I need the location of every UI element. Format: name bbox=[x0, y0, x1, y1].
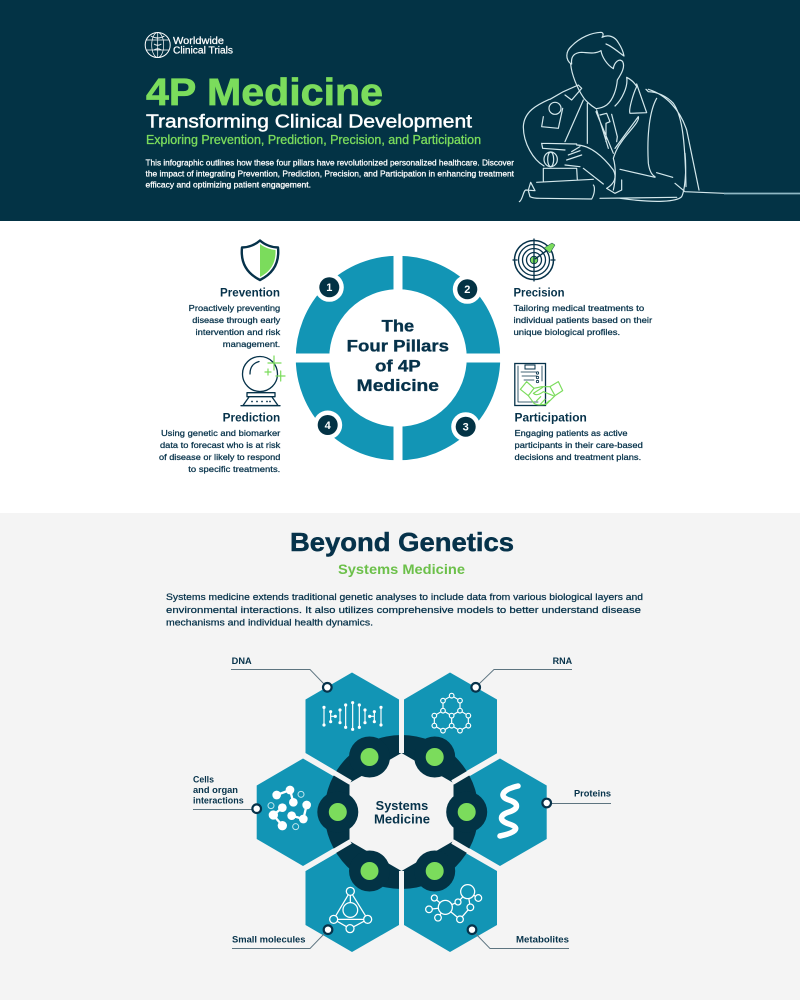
baseline stroke right bbox=[724, 192, 800, 194]
logo: Worldwide Clinical Trials: Worldwide bbox=[173, 35, 224, 47]
icon: shield bbox=[242, 240, 278, 280]
icon: small molecule bbox=[330, 887, 372, 933]
text: prediction bbox=[159, 413, 281, 474]
dark ring bbox=[324, 735, 478, 889]
centre label: Systems bbox=[376, 799, 428, 813]
text: prediction: to specific treatments. bbox=[188, 464, 280, 474]
callout: small molecules: Small molecules bbox=[232, 935, 306, 945]
hexagon gaps bbox=[304, 700, 499, 924]
callout: small molecules bbox=[232, 925, 332, 948]
donut chart: four pillars ring: 2 bbox=[464, 284, 470, 296]
intro text: This infographic outlines how these four pillars have revolutionized personalized healthcare. Discover bbox=[146, 157, 514, 167]
donut centre heading: The bbox=[382, 317, 414, 336]
callout: metabolites: Metabolites bbox=[516, 935, 569, 945]
icon: RNA bbox=[432, 693, 471, 733]
donut chart: four pillars ring: 4 bbox=[325, 420, 332, 432]
callout: metabolites bbox=[468, 925, 569, 948]
hexagon: cells bbox=[257, 758, 350, 866]
hexagon: small molecules bbox=[306, 844, 399, 952]
text: participation: Engaging patients as active bbox=[514, 428, 628, 438]
centre label bbox=[374, 799, 430, 827]
callout: cells and organ interactions bbox=[193, 775, 261, 813]
donut chart: four pillars ring bbox=[290, 250, 506, 466]
icon: crystal ball bbox=[241, 356, 285, 406]
diagram: systems medicine hexagons bbox=[257, 672, 547, 952]
centre hexagon bbox=[350, 753, 454, 871]
icon: DNA bbox=[323, 702, 382, 730]
panel: beyond genetics bbox=[0, 513, 800, 1000]
subtitle: Transforming Clinical Development bbox=[146, 112, 472, 132]
body text: mechanisms and individual health dynamics. bbox=[166, 618, 373, 628]
text: participation: participants in their care-based bbox=[514, 440, 643, 450]
donut centre heading bbox=[347, 317, 449, 395]
heading: beyond genetics: Beyond Genetics bbox=[290, 527, 514, 557]
callout: DNA: DNA bbox=[232, 656, 252, 666]
donut centre heading: Medicine bbox=[357, 376, 439, 395]
donut centre heading: of 4P bbox=[375, 356, 421, 376]
callout: DNA bbox=[231, 656, 332, 692]
text: prevention: management. bbox=[223, 339, 280, 349]
intro text: efficacy and optimizing patient engagement. bbox=[146, 180, 311, 190]
donut chart: four pillars ring: 3 bbox=[463, 422, 469, 434]
intro text bbox=[146, 157, 515, 190]
centre label: Medicine bbox=[374, 813, 430, 827]
intro text: the impact of integrating Prevention, Prediction, Precision, and Participation in enhancing treatment bbox=[146, 168, 515, 178]
text: prevention bbox=[189, 288, 281, 349]
panel: four pillars bbox=[159, 239, 652, 474]
hexagon: proteins bbox=[454, 758, 547, 866]
text: prevention: Prevention bbox=[220, 288, 280, 300]
callout: proteins: Proteins bbox=[574, 789, 611, 799]
hexagon: DNA bbox=[306, 672, 399, 780]
body text: environmental interactions. It also utilizes comprehensive models to better understand disease bbox=[166, 605, 641, 616]
icon: cells bbox=[268, 786, 311, 830]
text: participation bbox=[514, 413, 643, 462]
tagline: Exploring Prevention, Prediction, Precision, and Participation bbox=[146, 133, 481, 147]
subheading: systems medicine: Systems Medicine bbox=[338, 561, 465, 577]
hexagon: RNA bbox=[404, 672, 497, 780]
text: prediction: of disease or likely to respond bbox=[159, 452, 281, 462]
donut centre heading: Four Pillars bbox=[347, 337, 449, 356]
text: precision bbox=[514, 288, 652, 337]
illustration: scientist at a microscope, single line art bbox=[519, 32, 724, 202]
callout: RNA: RNA bbox=[553, 656, 573, 666]
text: prevention: intervention and risk bbox=[196, 327, 281, 337]
logo: Worldwide Clinical Trials: Clinical Trials bbox=[173, 44, 233, 56]
text: prediction: Prediction bbox=[223, 413, 280, 425]
callout: cells and organ interactions: Cells bbox=[193, 775, 214, 785]
text: precision: Precision bbox=[514, 288, 564, 300]
callout: proteins bbox=[542, 789, 611, 807]
panel: header bbox=[0, 0, 800, 221]
text: participation: Participation bbox=[514, 413, 587, 425]
node circles bbox=[317, 736, 487, 892]
title: 4P Medicine bbox=[146, 72, 383, 114]
baseline stroke left bbox=[0, 200, 520, 202]
text: precision: Tailoring medical treatments to bbox=[514, 303, 644, 313]
body text: Systems medicine extends traditional genetic analyses to include data from various biological layers and bbox=[166, 592, 643, 603]
icon: clipboard and handshake bbox=[515, 364, 563, 406]
text: participation: decisions and treatment plans. bbox=[514, 452, 641, 462]
text: prediction: Using genetic and biomarker bbox=[161, 428, 280, 438]
donut chart: four pillars ring: 1 bbox=[326, 282, 332, 294]
body text bbox=[166, 592, 643, 628]
icon: metabolites bbox=[426, 885, 482, 923]
callout: RNA bbox=[471, 656, 573, 692]
hexagon: metabolites bbox=[404, 844, 497, 952]
icon: protein helix bbox=[500, 786, 518, 836]
text: prevention: disease through early bbox=[192, 315, 281, 325]
callout: cells and organ interactions: and organ bbox=[193, 785, 238, 795]
logo: Worldwide Clinical Trials bbox=[145, 32, 233, 58]
text: precision: unique biological profiles. bbox=[514, 327, 620, 337]
text: precision: individual patients based on their bbox=[514, 315, 652, 325]
callout: cells and organ interactions: interactions bbox=[193, 796, 244, 806]
text: prevention: Proactively preventing bbox=[189, 303, 280, 313]
icon: target with arrow bbox=[513, 239, 555, 281]
green dots bbox=[329, 748, 476, 880]
text: prediction: data to forecast who is at risk bbox=[160, 440, 281, 450]
